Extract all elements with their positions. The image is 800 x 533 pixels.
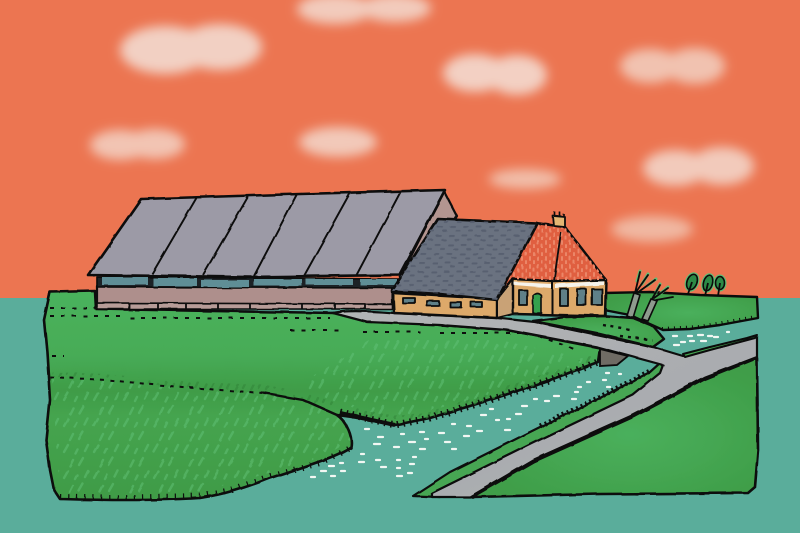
barn window band xyxy=(97,277,398,288)
white eaves band xyxy=(514,281,604,288)
road xyxy=(333,311,757,497)
barn wall xyxy=(97,286,392,307)
grass under house xyxy=(533,316,664,347)
chimney xyxy=(553,216,565,227)
sky xyxy=(0,0,800,298)
right triangular field xyxy=(472,358,758,497)
water sparkles xyxy=(311,332,729,477)
willow trees xyxy=(627,271,673,321)
lower field edge line xyxy=(263,393,337,415)
front wall xyxy=(513,279,606,316)
grass strip along road xyxy=(413,363,664,497)
upper field hatch xyxy=(300,340,590,418)
lower field hatch xyxy=(52,378,350,494)
grey slate roof xyxy=(392,219,537,300)
red roof xyxy=(497,223,606,299)
water background xyxy=(0,298,800,533)
side wall windows xyxy=(403,298,482,307)
dark hatch band xyxy=(52,356,598,425)
clouds xyxy=(90,0,754,242)
barn xyxy=(88,190,457,309)
barn gable xyxy=(398,191,457,282)
field dash rows xyxy=(50,308,577,356)
back field right xyxy=(604,292,758,330)
hedge ticks xyxy=(340,362,598,425)
long side wall xyxy=(393,293,497,318)
small trees xyxy=(682,270,726,296)
small grass strip right xyxy=(683,335,757,357)
barn roof xyxy=(88,190,445,277)
farmhouse xyxy=(392,212,606,318)
bridge xyxy=(600,349,628,366)
front windows xyxy=(519,289,602,306)
door xyxy=(533,293,541,313)
corner wall xyxy=(497,279,513,318)
barn plinth xyxy=(97,303,392,309)
main field xyxy=(44,291,600,500)
